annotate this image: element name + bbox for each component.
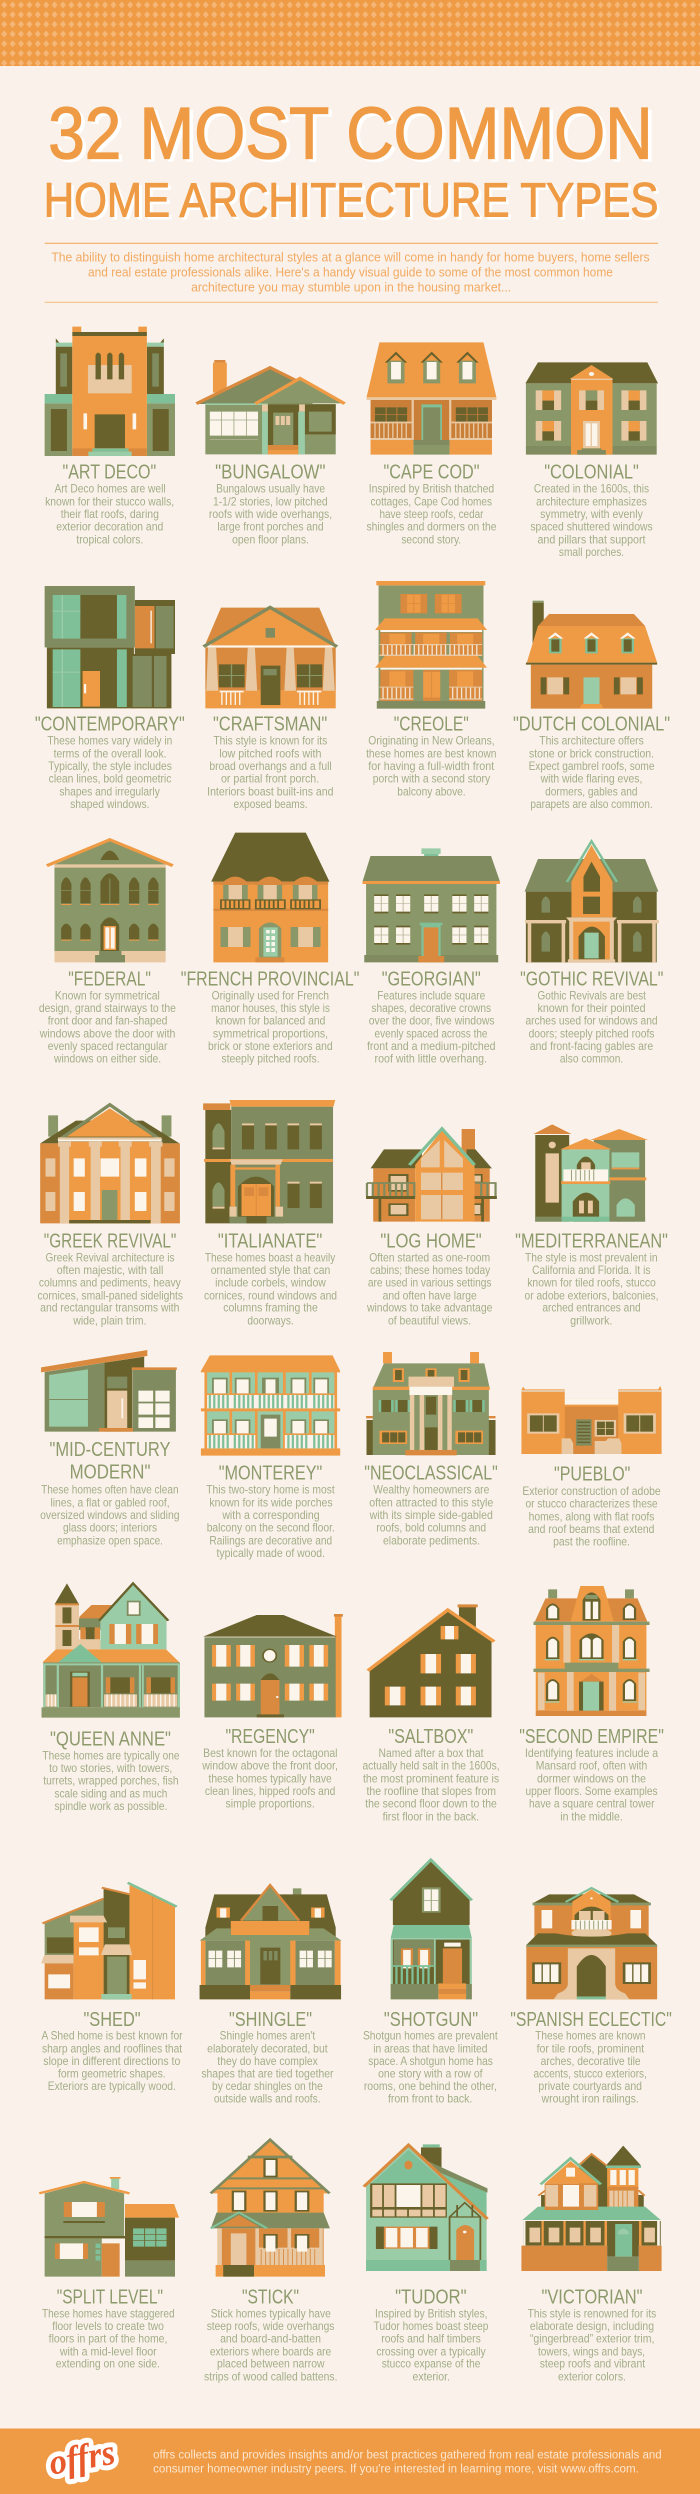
panel: french provincial [181, 833, 359, 1065]
panel: second empire [519, 1586, 664, 1823]
panel: craftsman [204, 607, 337, 811]
icon: mediterranean house [533, 1124, 648, 1222]
description: tudor: Inspired by British styles, [375, 2307, 488, 2320]
description: regency [201, 1747, 338, 1810]
description: victorian: towers, wings and bays, [538, 2345, 645, 2358]
icon: art deco house [45, 327, 175, 456]
description: contemporary [47, 735, 172, 811]
description: georgian: evenly spaced across the [375, 1027, 488, 1040]
row 1 [45, 327, 658, 559]
panel: dutch colonial [513, 601, 670, 811]
panel: mid-century modern [40, 1350, 179, 1547]
description: shingle: elaborately decorated, but [207, 2042, 328, 2055]
description: split level: extending on one side. [56, 2358, 160, 2370]
description: stick: and board-and-batten [220, 2333, 321, 2345]
heading: shotgun: "SHOTGUN" [384, 2009, 478, 2031]
description: french provincial: Originally used for French [212, 989, 329, 1002]
description: regency: simple proportions. [225, 1798, 315, 1810]
description: log home [366, 1251, 493, 1327]
description: georgian: over the door, five windows [369, 1015, 495, 1027]
description: shingle: by cedar shingles on the [212, 2080, 323, 2093]
description: split level [42, 2307, 175, 2370]
icon: log home [366, 1129, 497, 1222]
description: bungalow [209, 483, 332, 546]
icon: regency house [203, 1614, 343, 1717]
row 8 [39, 2140, 662, 2383]
heading: log home: "LOG HOME" [380, 1230, 482, 1252]
description: gothic revival: known for their pointed [538, 1002, 646, 1015]
icon: contemporary house [45, 586, 175, 708]
description: split level: floor levels to create two [52, 2320, 164, 2333]
description: french provincial: known for balanced and [216, 1015, 325, 1027]
row 2 [35, 581, 670, 811]
description: neoclassical: elaborate pediments. [383, 1534, 480, 1547]
description: split level: These homes have staggered [42, 2307, 175, 2320]
heading: contemporary: "CONTEMPORARY" [35, 714, 185, 736]
icon: creole house [375, 581, 487, 709]
description: creole: these homes are best known [366, 747, 496, 760]
heading: art deco: "ART DECO" [63, 461, 156, 483]
heading: creole: "CREOLE" [394, 714, 469, 736]
description: regency: these homes typically have [208, 1772, 332, 1785]
description: creole: Originating in New Orleans, [368, 735, 495, 747]
description: mediterranean: arched entrances and [542, 1302, 641, 1314]
description: tudor: Tudor homes boast steep [374, 2320, 489, 2333]
icon: french provincial house [211, 833, 329, 962]
description: shotgun: rooms, one behind the other, [364, 2080, 497, 2093]
description: federal: design, grand stairways to the [39, 1002, 176, 1015]
panel: neoclassical [364, 1352, 498, 1547]
description: mid-century modern: emphasize open space. [57, 1534, 163, 1547]
description: federal: windows on either side. [53, 1053, 161, 1065]
description: monterey: This two-story home is most [206, 1484, 335, 1496]
description: greek revival [38, 1251, 183, 1327]
heading: italianate: "ITALIANATE" [218, 1230, 322, 1252]
panel: georgian [363, 848, 500, 1065]
icon: craftsman house [204, 607, 337, 708]
icon: mid-century modern house [41, 1350, 177, 1432]
description: spanish eclectic: wrought iron railings. [541, 2093, 639, 2105]
description: shingle: outside walls and roofs. [214, 2093, 321, 2105]
description: tudor [374, 2307, 489, 2383]
description: french provincial [208, 989, 333, 1065]
description: cape cod: cottages, Cape Cod homes [371, 495, 492, 508]
description: greek revival: wide, plain trim. [72, 1314, 146, 1327]
panel: greek revival [38, 1105, 183, 1327]
description: italianate: These homes boast a heavily [205, 1251, 335, 1264]
heading: shingle: "SHINGLE" [229, 2009, 312, 2031]
panel: regency [201, 1614, 343, 1810]
panel: colonial [525, 362, 658, 559]
description: french provincial: symmetrical proportions, [213, 1027, 328, 1040]
description: saltbox: Named after a box that [379, 1747, 484, 1760]
panel: shotgun [363, 1860, 498, 2105]
description: saltbox: the most prominent feature is [363, 1772, 499, 1785]
heading: french provincial: "FRENCH PROVINCIAL" [181, 968, 359, 990]
heading: mid-century modern: MODERN" [70, 1462, 150, 1484]
description: greek revival: and rectangular transoms with [40, 1302, 179, 1314]
icon: victorian house [521, 2146, 662, 2271]
heading: saltbox: "SALTBOX" [388, 1726, 473, 1748]
description: art deco: tropical colors. [76, 533, 143, 546]
description: georgian: front and a medium-pitched [367, 1040, 496, 1053]
row 6 [42, 1583, 664, 1823]
description: second empire: dormer windows on the [537, 1772, 646, 1785]
description: queen anne [42, 1749, 180, 1813]
icon: dutch colonial house [526, 601, 657, 709]
description: shingle: they do have complex [217, 2055, 318, 2068]
description: federal: front door and fan-shaped [48, 1015, 167, 1027]
panel: gothic revival [520, 841, 663, 1065]
description: queen anne: spindle work as possible. [54, 1800, 167, 1813]
description: italianate [204, 1251, 337, 1327]
description: shotgun: one story with a row of [378, 2068, 483, 2080]
description: tudor: roofs and half timbers [381, 2333, 481, 2345]
logo: offrs: offrs [46, 2432, 118, 2483]
description: saltbox: first floor in the back. [383, 1810, 479, 1823]
description: federal [39, 989, 176, 1065]
description: mid-century modern [40, 1484, 179, 1547]
description: colonial [530, 483, 653, 559]
description: second empire: in the middle. [560, 1810, 623, 1823]
description: shingle: Shingle homes aren't [220, 2030, 315, 2042]
icon: stick house [211, 2140, 330, 2277]
description: monterey: Railings are decorative and [209, 1534, 332, 1547]
description: log home: of beautiful views. [388, 1314, 471, 1327]
description: italianate: include corbels, window [215, 1277, 326, 1289]
description: gothic revival [525, 989, 658, 1065]
heading: mid-century modern: "MID-CENTURY [50, 1439, 171, 1461]
description: craftsman: exposed beams. [233, 798, 308, 811]
description: stick: steep roofs, wide overhangs [207, 2320, 334, 2333]
description: shingle: shapes that are tied together [201, 2068, 334, 2080]
heading: craftsman: "CRAFTSMAN" [213, 714, 327, 736]
heading: neoclassical: "NEOCLASSICAL" [364, 1463, 498, 1485]
description: saltbox: the roofline that slopes from [367, 1785, 496, 1798]
description: colonial: and pillars that support [538, 533, 646, 546]
description: creole: porch with a second story [373, 773, 490, 785]
icon: spanish eclectic house [526, 1888, 657, 1999]
description: art deco: Art Deco homes are well [54, 483, 166, 495]
description: french provincial: manor houses, this style is [211, 1002, 330, 1015]
description: stick [204, 2307, 338, 2383]
description: art deco [45, 483, 174, 546]
description: dutch colonial [529, 735, 655, 811]
description: pueblo [522, 1485, 661, 1548]
description: pueblo: past the roofline. [553, 1536, 630, 1548]
description: shotgun: space. A shotgun home has [368, 2055, 493, 2068]
description: cape cod: second story. [401, 533, 461, 546]
description: italianate: cornices, round windows and [204, 1289, 337, 1302]
description: neoclassical [369, 1484, 494, 1547]
description: colonial: symmetry, with evenly [540, 508, 643, 521]
description: victorian [528, 2307, 656, 2383]
description: contemporary: clean lines, bold geometric [49, 773, 172, 785]
panel: italianate [203, 1100, 337, 1327]
description: shotgun: in areas that have limited [373, 2042, 488, 2055]
description: shed: sharp angles and rooflines that [42, 2042, 182, 2055]
description: second empire [525, 1747, 658, 1823]
icon: shotgun house [391, 1860, 472, 1999]
description: federal: evenly spaced rectangular [48, 1040, 168, 1053]
row 5 [40, 1350, 662, 1560]
icon: georgian house [363, 848, 500, 962]
description: contemporary: shaped windows. [70, 798, 150, 811]
description: split level: floors in part of the home, [49, 2333, 167, 2345]
description: cape cod: shingles and dormers on the [367, 521, 497, 533]
description: dutch colonial: dormers, gables and [545, 785, 638, 798]
panel: mediterranean [515, 1124, 668, 1327]
description: contemporary: terms of the overall look. [54, 747, 167, 760]
icon: tudor house [364, 2144, 488, 2271]
description: bungalow: large front porches and [217, 521, 324, 533]
icon: shingle house [200, 1885, 342, 1999]
description: saltbox: actually held salt in the 1600s, [363, 1760, 500, 1772]
description: split level: with a mid-level floor [59, 2345, 157, 2358]
description: victorian: steep roofs and vibrant [540, 2358, 645, 2370]
description: saltbox [363, 1747, 500, 1823]
heading: queen anne: "QUEEN ANNE" [50, 1728, 171, 1750]
description: bungalow: Bungalows usually have [216, 483, 325, 495]
description: art deco: their flat roofs, daring [61, 508, 159, 521]
description: tudor: crossing over a typically [376, 2345, 486, 2358]
icon: saltbox house [368, 1604, 494, 1717]
description: shed [42, 2030, 183, 2093]
footer text [153, 2448, 662, 2476]
description: bungalow: open floor plans. [232, 533, 309, 546]
description: gothic revival: also common. [560, 1053, 623, 1065]
description: colonial: small porches. [559, 546, 624, 559]
icon: italianate house [203, 1100, 335, 1223]
description: shotgun: from front to back. [388, 2093, 472, 2105]
description: monterey: known for its wide porches [209, 1496, 333, 1509]
description: mid-century modern: These homes often have clean [41, 1484, 179, 1496]
description: italianate: ornamented style that can [211, 1264, 330, 1277]
description: italianate: doorways. [247, 1314, 294, 1327]
panel: bungalow [196, 360, 345, 546]
description: monterey: typically made of wood. [217, 1547, 325, 1560]
description: regency: clean lines, hipped roofs and [205, 1785, 335, 1798]
description: dutch colonial: This architecture offers [539, 735, 644, 747]
intro text [45, 243, 658, 303]
description: queen anne: scale siding and as much [54, 1787, 167, 1800]
description: mid-century modern: glass doors; interiors [63, 1522, 157, 1534]
description: greek revival: Greek Revival architecture is [46, 1251, 175, 1264]
description: queen anne: to two stories, with towers, [49, 1762, 172, 1775]
icon: colonial house [525, 362, 658, 455]
footer band [0, 2428, 700, 2494]
heading: stick: "STICK" [242, 2286, 299, 2308]
logo: offrs: offrs [46, 2432, 118, 2483]
description: shed: A Shed home is best known for [42, 2030, 183, 2042]
description: craftsman: This style is known for its [213, 735, 327, 747]
description: georgian: shapes, decorative crowns [371, 1002, 491, 1015]
panel: art deco [45, 327, 175, 546]
description: federal: Known for symmetrical [55, 989, 160, 1002]
description: contemporary: shapes and irregularly [59, 785, 160, 798]
description: second empire: Mansard roof, often with [536, 1760, 647, 1772]
description: log home: and often have large [383, 1289, 477, 1302]
heading: federal: "FEDERAL" [68, 968, 151, 990]
description: tudor: stucco expanse of the [382, 2358, 481, 2370]
panel: queen anne [42, 1583, 180, 1813]
description: neoclassical: often attracted to this style [369, 1496, 494, 1509]
description: neoclassical: Wealthy homeowners are [373, 1484, 490, 1496]
panel: split level [39, 2177, 179, 2370]
icon: gothic revival house [525, 841, 659, 962]
description: tudor: exterior. [413, 2370, 450, 2383]
description: spanish eclectic: private courtyards and [538, 2080, 642, 2093]
icon: federal house [47, 840, 173, 962]
description: monterey: balcony on the second floor. [207, 1522, 335, 1534]
description: georgian: roof with little overhang. [375, 1053, 487, 1065]
description: regency: Best known for the octagonal [203, 1747, 338, 1760]
description: shotgun [363, 2030, 498, 2105]
panel: spanish eclectic [510, 1888, 672, 2105]
description: neoclassical: with its simple side-gabled [369, 1509, 493, 1522]
description: queen anne: turrets, wrapped porches, fish [43, 1775, 179, 1787]
icon: neoclassical house [366, 1352, 496, 1455]
description: shotgun: Shotgun homes are prevalent [363, 2030, 498, 2042]
description: log home: Often started as one-room [369, 1251, 490, 1264]
row 4 [38, 1100, 668, 1327]
description: georgian [367, 989, 496, 1065]
description: french provincial: steeply pitched roofs. [221, 1053, 320, 1065]
description: spanish eclectic: for tile roofs, prominent [537, 2042, 644, 2055]
panel: log home [366, 1129, 497, 1327]
description: stick: Stick homes typically have [211, 2307, 331, 2320]
icon: bungalow house [196, 360, 345, 454]
panel: contemporary [35, 586, 185, 811]
description: log home: cabins; these homes today [370, 1264, 490, 1277]
heading: cape cod: "CAPE COD" [383, 461, 479, 483]
description: cape cod [367, 483, 497, 546]
heading: mid-century modern [50, 1439, 171, 1484]
icon: shed house [41, 1883, 177, 1999]
description: greek revival: often majestic, with tall [57, 1264, 163, 1277]
panel: federal [39, 840, 176, 1065]
description: regency: window above the front door, [201, 1760, 338, 1772]
description: french provincial: brick or stone exteriors and [208, 1040, 333, 1053]
description: craftsman: broad overhangs and a full [209, 760, 332, 773]
description: mediterranean [525, 1251, 658, 1327]
description: shed: Exteriors are typically wood. [48, 2080, 176, 2093]
description: stick: exteriors where boards are [210, 2345, 331, 2358]
description: queen anne: These homes are typically one [42, 1749, 180, 1762]
description: log home: are used in various settings [368, 1277, 492, 1289]
description: saltbox: the second floor down to the [365, 1798, 497, 1810]
panel: pueblo [521, 1386, 662, 1548]
row 3 [39, 833, 663, 1065]
description: art deco: exterior decoration and [56, 521, 163, 533]
description: creole: balcony above. [397, 785, 466, 798]
icon: queen anne house [42, 1583, 180, 1718]
description: art deco: known for their stucco walls, [45, 495, 174, 508]
panel: shed [41, 1883, 183, 2093]
icon: second empire house [533, 1586, 650, 1716]
description: mid-century modern: oversized windows and sliding [40, 1509, 179, 1522]
description: monterey: with a corresponding [222, 1509, 320, 1522]
heading: monterey: "MONTEREY" [219, 1463, 322, 1485]
panel: stick [204, 2140, 338, 2383]
heading: colonial: "COLONIAL" [544, 461, 639, 483]
description: dutch colonial: with wide flaring eves, [540, 773, 642, 785]
description: greek revival: columns and pediments, heavy [39, 1277, 181, 1289]
description: log home: windows to take advantage [366, 1302, 493, 1314]
icon: monterey house [201, 1355, 340, 1456]
icon: greek revival house [40, 1105, 180, 1223]
description: victorian: exterior colors. [558, 2370, 626, 2383]
description: federal: windows above the door with [39, 1027, 175, 1040]
description: bungalow: roofs with wide overhangs, [209, 508, 332, 521]
heading: split level: "SPLIT LEVEL" [57, 2286, 163, 2308]
heading: bungalow: "BUNGALOW" [215, 461, 325, 483]
panel: creole [366, 581, 496, 798]
intro text: architecture you may stumble upon in the housing market... [191, 281, 511, 295]
description: craftsman [207, 735, 333, 811]
description: shed: form geometric shapes. [58, 2068, 166, 2080]
panel: saltbox [363, 1604, 500, 1823]
title [44, 93, 661, 230]
description: georgian: Features include square [377, 989, 486, 1002]
heading: tudor: "TUDOR" [395, 2286, 467, 2308]
description: mid-century modern: lines, a flat or gabled roof, [50, 1496, 170, 1509]
panel: cape cod [367, 342, 497, 546]
description: stick: placed between narrow [217, 2358, 325, 2370]
heading: georgian: "GEORGIAN" [382, 968, 481, 990]
description: cape cod: Inspired by British thatched [369, 483, 494, 495]
heading: shed: "SHED" [83, 2009, 141, 2031]
description: spanish eclectic: arches, decorative tile [541, 2055, 641, 2068]
description: craftsman: Interiors boast built-ins and [207, 785, 333, 798]
description: contemporary: Typically, the style includes [48, 760, 172, 773]
description: craftsman: low pitched roofs with [219, 747, 321, 760]
panel: shingle [200, 1885, 342, 2105]
panel: victorian [521, 2146, 662, 2383]
description: italianate: columns framing the [223, 1302, 318, 1314]
description: contemporary: These homes vary widely in [47, 735, 172, 747]
description: creole [366, 735, 496, 798]
description: spanish eclectic [533, 2030, 647, 2105]
panel: tudor [364, 2144, 489, 2383]
description: stick: strips of wood called battens. [204, 2370, 338, 2383]
description: cape cod: have steep roofs, cedar [379, 508, 484, 521]
description: craftsman: or partial front porch. [221, 773, 319, 785]
row 7 [41, 1860, 672, 2105]
heading: pueblo: "PUEBLO" [554, 1464, 630, 1486]
icon: cape cod house [367, 342, 496, 455]
description: bungalow: 1-1/2 stories, low pitched [213, 495, 328, 508]
description: creole: for having a full-width front [368, 760, 494, 773]
icon: split level house [39, 2177, 179, 2277]
description: greek revival: cornices, small-paned sidelights [38, 1289, 183, 1302]
description: shingle [201, 2030, 334, 2105]
panel: monterey [201, 1355, 340, 1560]
icon: pueblo house [521, 1386, 662, 1454]
description: neoclassical: roofs, bold columns and [376, 1522, 486, 1534]
header band [0, 0, 700, 66]
description: shed: slope in different directions to [43, 2055, 181, 2068]
heading: regency: "REGENCY" [225, 1726, 315, 1748]
heading: greek revival: "GREEK REVIVAL" [44, 1230, 176, 1252]
description: monterey [206, 1484, 335, 1560]
description: mediterranean: grillwork. [570, 1314, 613, 1327]
